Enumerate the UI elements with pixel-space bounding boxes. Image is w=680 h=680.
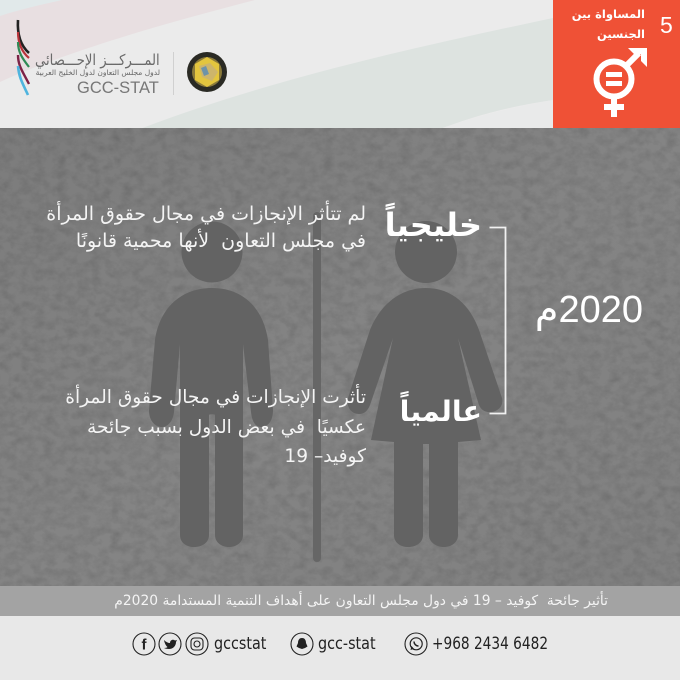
header background — [0, 0, 553, 128]
text block: global finding: تأثرت الإنجازات في مجال حقوق المرأة — [65, 387, 366, 408]
logo subtitle: لدول مجلس التعاون لدول الخليج العربية — [36, 68, 160, 77]
text block: global finding: عكسيًا في بعض الدول بسبب جائحة — [87, 416, 366, 438]
SDG title: المساواة بين — [572, 7, 645, 21]
woman figure — [348, 221, 502, 547]
caption band — [0, 586, 680, 616]
icon: gender equality symbol — [594, 48, 647, 117]
SDG title: الجنسين — [597, 27, 645, 41]
icon: twitter — [158, 632, 182, 656]
handle: gccstat: gccstat — [214, 634, 266, 653]
icon: facebook — [132, 632, 156, 656]
icon: snapchat — [290, 632, 314, 656]
text block: Gulf finding: لم تتأثر الإنجازات في مجال حقوق المرأة — [46, 203, 366, 225]
logo GCC-STAT wordmark: GCC-STAT — [77, 79, 159, 97]
GCC emblem — [187, 52, 227, 92]
heading: Gulf: خليجياً — [385, 206, 482, 244]
heading: Global: عالمياً — [400, 395, 482, 428]
SDG number: 5 — [660, 12, 673, 38]
bracket linking both scopes — [490, 226, 506, 414]
text block: Gulf finding — [46, 200, 366, 252]
icon: facebook: f — [142, 636, 148, 654]
footer contact bar — [0, 616, 680, 680]
phone number: +968 2434 6482 — [432, 634, 548, 653]
logo separator — [173, 52, 174, 95]
icon: whatsapp — [404, 632, 428, 656]
text block: global finding: كوفيد– 19 — [284, 446, 366, 467]
pole divider — [313, 212, 321, 562]
caption text: تأثير جائحة كوفيد – 19 في دول مجلس التعاون على أهداف التنمية المستدامة 2020م — [114, 593, 608, 609]
panel: concrete background — [0, 128, 680, 586]
SDG title — [572, 7, 645, 41]
icon: instagram — [185, 632, 209, 656]
text block: global finding — [65, 384, 366, 467]
text block: Gulf finding: في مجلس التعاون لأنها محمية قانونًا — [76, 230, 366, 252]
handle: gcc-stat: gcc-stat — [318, 634, 376, 653]
logo arabic name: المـــركـــز الإحـــصائي — [35, 51, 160, 69]
panel: SDG 5 gender equality badge — [553, 0, 680, 129]
year label: 2020م — [535, 289, 643, 331]
logo ribbon mark — [16, 20, 30, 96]
GCC-STAT logo — [16, 20, 174, 97]
man figure — [149, 222, 273, 547]
